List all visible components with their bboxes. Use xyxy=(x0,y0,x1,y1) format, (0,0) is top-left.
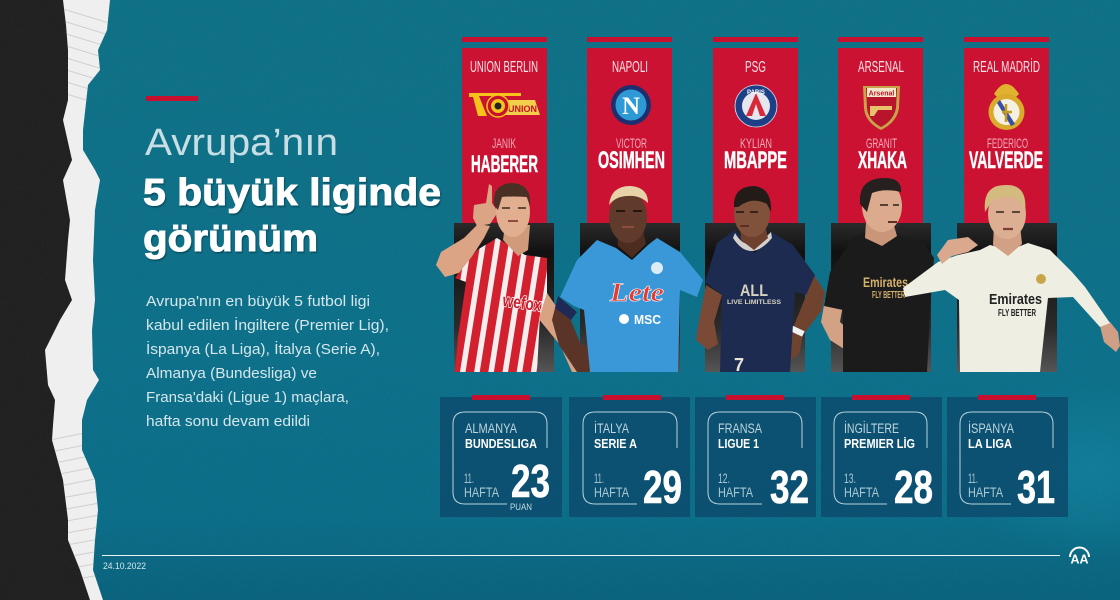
week: 11. xyxy=(968,471,978,486)
player: Osimhen xyxy=(552,186,703,372)
first name: FEDERICO xyxy=(987,135,1028,151)
panel: Arsenal banner xyxy=(838,37,923,223)
neck and head xyxy=(503,225,530,256)
club name: PSG xyxy=(745,59,766,76)
card: Ligue 1 xyxy=(695,395,816,517)
last name: HABERER xyxy=(471,151,538,178)
torn white paper edge xyxy=(45,0,110,600)
shirt xyxy=(824,232,934,372)
arms xyxy=(552,300,594,372)
points: 32 xyxy=(770,461,809,513)
club name: REAL MADRİD xyxy=(973,57,1040,76)
description text: Fransa'daki (Ligue 1) maçlara, xyxy=(146,390,349,406)
title line 3: görünüm xyxy=(143,218,318,260)
week: 13. xyxy=(844,471,856,486)
neck and head xyxy=(617,225,646,258)
card: Bundesliga: HAFTA xyxy=(464,485,499,500)
description text: İspanya (La Liga), İtalya (Serie A), xyxy=(146,340,380,358)
league: LA LIGA xyxy=(968,437,1012,451)
sponsor: wefox xyxy=(501,290,543,315)
arm right xyxy=(538,290,583,372)
card: Bundesliga xyxy=(440,395,562,517)
shirt xyxy=(455,238,547,372)
club name: ARSENAL xyxy=(858,59,904,76)
first name: JANIK xyxy=(492,135,516,151)
icon: Union Berlin logo xyxy=(469,93,540,117)
first name: KYLIAN xyxy=(740,135,772,151)
points: 31 xyxy=(1017,461,1055,513)
sponsor MSC: MSC xyxy=(634,312,662,327)
country: FRANSA xyxy=(718,421,762,436)
icon: Union Berlin logo: UNION xyxy=(508,104,537,114)
league: BUNDESLIGA xyxy=(465,437,537,451)
last name: VALVERDE xyxy=(969,147,1043,174)
panel: Union Berlin banner xyxy=(462,37,547,223)
arms xyxy=(696,285,722,350)
week: 11. xyxy=(594,471,604,486)
points: 29 xyxy=(643,461,682,513)
sponsor ALL: ALL xyxy=(740,281,768,300)
neck and head xyxy=(740,225,768,250)
last name: OSIMHEN xyxy=(598,147,665,174)
title line 1: Avrupa’nın xyxy=(145,122,338,164)
league: LIGUE 1 xyxy=(718,437,759,451)
player: Haberer xyxy=(436,183,583,372)
icon: Real Madrid logo xyxy=(988,84,1024,130)
panel: PSG banner xyxy=(713,37,798,223)
shirt xyxy=(560,238,703,372)
title line 2: 5 büyük liginde xyxy=(143,172,441,214)
title xyxy=(143,96,441,260)
first name: GRANIT xyxy=(866,135,897,151)
player: Valverde: FLY BETTER xyxy=(998,308,1036,319)
card: Premier Lig: HAFTA xyxy=(844,485,879,500)
panel: Napoli banner xyxy=(587,37,672,223)
country: ALMANYA xyxy=(465,421,517,436)
last name: XHAKA xyxy=(858,147,907,174)
points: 28 xyxy=(894,461,933,513)
last name: MBAPPE xyxy=(724,147,787,174)
points: 23 xyxy=(511,455,550,507)
player: Mbappe xyxy=(696,186,825,375)
sponsor Emirates: Emirates xyxy=(863,274,908,290)
club name: NAPOLI xyxy=(612,59,648,76)
icon: Arsenal logo: Arsenal xyxy=(869,90,894,98)
description text: kabul edilen İngiltere (Premier Lig), xyxy=(146,316,389,334)
card: La Liga xyxy=(947,395,1068,517)
player: Mbappe: LIVE LIMITLESS xyxy=(727,300,781,306)
hand right xyxy=(1100,322,1120,352)
armband xyxy=(555,296,577,320)
league: SERIE A xyxy=(594,437,637,451)
icon: AA logo: AA xyxy=(1070,552,1089,566)
arm xyxy=(821,300,885,363)
hand xyxy=(937,237,978,264)
sponsor Lete: Lete xyxy=(609,278,664,307)
shirt number: 7 xyxy=(734,355,744,375)
player: Xhaka: FLY BETTER xyxy=(872,290,905,301)
description text: Almanya (Bundesliga) ve xyxy=(146,366,317,382)
icon: PSG logo xyxy=(735,85,777,127)
card: Serie A xyxy=(569,395,690,517)
week: 12. xyxy=(718,471,730,486)
description text: hafta sonu devam edildi xyxy=(146,414,310,430)
neck and head xyxy=(865,222,897,246)
player: Valverde xyxy=(903,185,1120,372)
sponsor Emirates: Emirates xyxy=(989,291,1042,308)
club name: UNION BERLIN xyxy=(470,59,538,76)
week: 11. xyxy=(464,471,474,486)
footer rule and date: 24.10.2022 xyxy=(103,561,146,572)
icon: Arsenal logo xyxy=(863,86,900,130)
shirt with sleeves xyxy=(903,243,1110,372)
icon: Napoli logo xyxy=(611,85,651,125)
card: Ligue 1: HAFTA xyxy=(718,485,753,500)
card: Serie A: HAFTA xyxy=(594,485,629,500)
panel: Real Madrid banner xyxy=(964,37,1049,223)
title accent bar xyxy=(146,96,198,101)
country: İTALYA xyxy=(594,421,629,436)
icon: Napoli logo: N xyxy=(622,93,640,120)
description text xyxy=(146,294,389,430)
player: Xhaka xyxy=(821,178,934,372)
card: Premier Lig xyxy=(821,395,942,517)
points unit: PUAN xyxy=(510,502,532,512)
icon: PSG logo: PARIS xyxy=(747,90,765,96)
photo backdrops xyxy=(454,223,1057,372)
raised arm xyxy=(436,224,490,277)
country: İNGİLTERE xyxy=(844,421,899,436)
country: İSPANYA xyxy=(968,421,1014,436)
description text: Avrupa'nın en büyük 5 futbol ligi xyxy=(146,294,370,310)
league: PREMIER LİG xyxy=(844,436,915,451)
card: La Liga: HAFTA xyxy=(968,485,1003,500)
neck and head xyxy=(993,225,1022,256)
shirt xyxy=(705,230,815,372)
background: dark concrete strip xyxy=(0,0,100,600)
first name: VICTOR xyxy=(616,135,647,151)
